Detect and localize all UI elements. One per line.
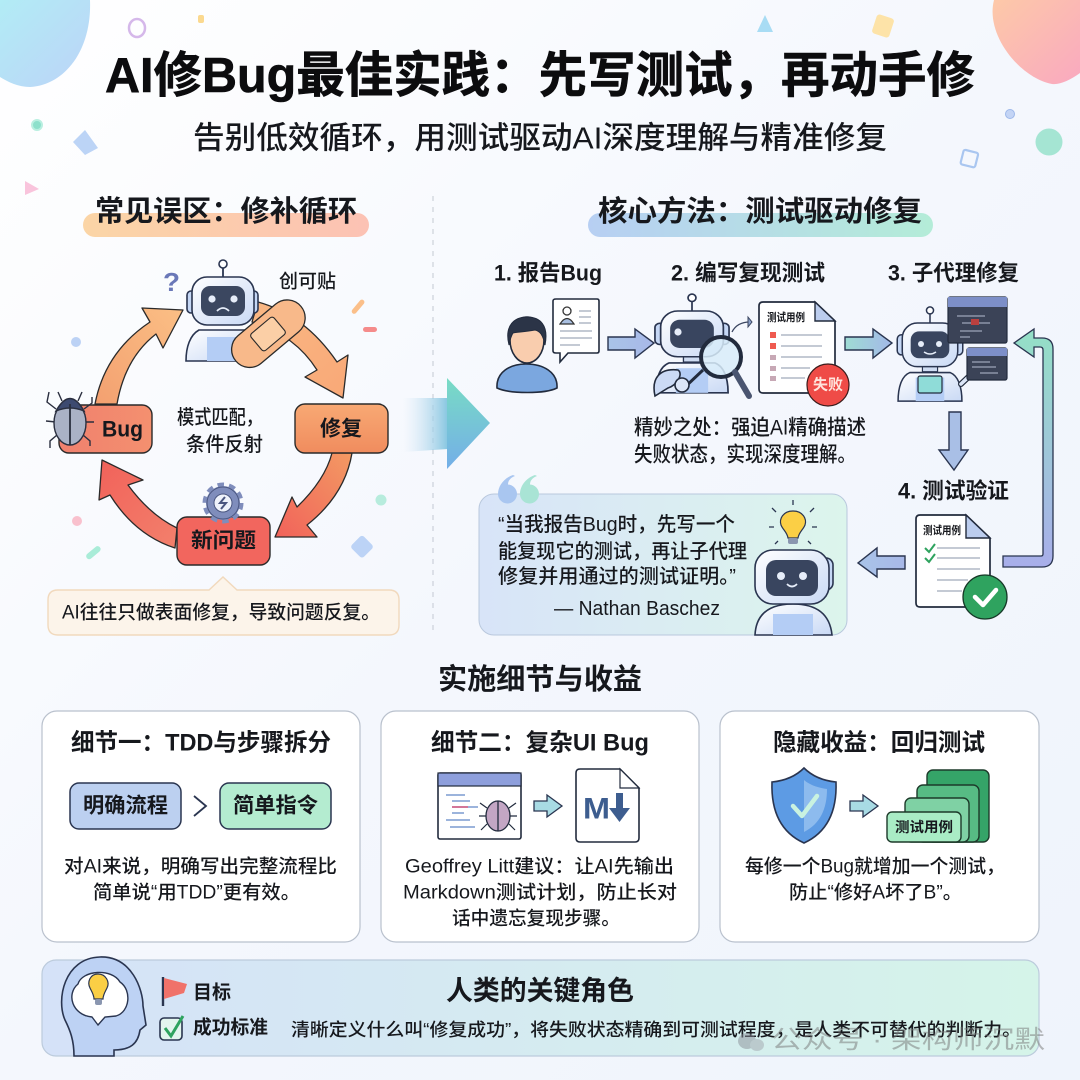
panel: key human role xyxy=(42,957,1039,1056)
section heading: details and benefits: 实施细节与收益 xyxy=(438,663,642,696)
decorative corner blobs xyxy=(0,0,1080,560)
heading: pitfall: 常见误区：修补循环 xyxy=(95,195,357,228)
card body xyxy=(64,856,337,904)
button: explicit flow xyxy=(70,783,181,829)
quote text: 能复现它的测试，再让子代理 xyxy=(498,540,747,563)
arrow: step 3 to 4 xyxy=(939,412,968,470)
panel: quote xyxy=(479,475,847,635)
icon: light bulb xyxy=(769,500,817,544)
button: simple command xyxy=(220,783,331,829)
quote text xyxy=(498,513,747,620)
step 1 label: 1. 报告Bug xyxy=(494,260,602,286)
divider xyxy=(432,196,434,630)
banner body: 清晰定义什么叫“修复成功”，将失败状态精确到可测试程度，是人类不可替代的判断力。 xyxy=(291,1020,1021,1040)
text: subtle point: 精妙之处：强迫AI精确描述 xyxy=(634,416,866,440)
quote text: — Nathan Baschez xyxy=(554,598,720,620)
icon: passing test document: 测试用例 xyxy=(923,523,961,537)
card body: 防止“修好A坏了B”。 xyxy=(789,882,962,904)
icon: stacked test cases xyxy=(887,770,989,842)
card body: Geoffrey Litt建议：让AI先输出 xyxy=(405,856,674,878)
icon: sad robot xyxy=(163,260,258,361)
icon: greater than xyxy=(194,796,206,816)
arrow: step 4 to quote xyxy=(858,548,905,577)
banner title: 人类的关键角色 xyxy=(446,976,634,1006)
icon: robot with magnifier xyxy=(654,294,752,396)
icon: test case document, failed: 失败 xyxy=(813,376,843,394)
icon: test case document, failed xyxy=(759,302,849,406)
center text: 模式匹配， xyxy=(177,406,263,429)
arrow: shield to tests xyxy=(850,795,878,817)
icon: bug xyxy=(46,392,94,448)
arrow: loop back from test to sub-agent xyxy=(1003,329,1053,567)
icon: checkbox xyxy=(160,1016,183,1040)
heading: pitfall xyxy=(83,195,369,237)
icon: sub-agent robot with screens xyxy=(897,297,1007,401)
arrow: step 2 to 3 xyxy=(845,329,892,358)
card body: 对AI来说，明确写出完整流程比 xyxy=(64,856,337,878)
card title: 细节二：复杂UI Bug xyxy=(431,730,649,756)
callout: surface fixes xyxy=(48,577,399,635)
icon: markdown file xyxy=(576,769,639,842)
icon: shield xyxy=(772,768,836,843)
arrow: new problem to bug xyxy=(99,460,177,548)
box: fix: 修复 xyxy=(320,418,362,440)
box: bug: Bug xyxy=(102,416,143,442)
text: subtle point: 失败状态，实现深度理解。 xyxy=(634,444,856,466)
card body: 简单说“用TDD”更有效。 xyxy=(93,882,300,904)
quote text: 修复并用通过的测试证明。” xyxy=(498,565,736,588)
arrow: fix to new problem xyxy=(275,453,352,537)
label: bandage: 创可贴 xyxy=(279,270,336,292)
icon: test case document, failed: 测试用例 xyxy=(767,310,805,324)
center text: 条件反射 xyxy=(186,433,263,456)
title: AI修Bug最佳实践：先写测试，再动手修 xyxy=(105,49,975,103)
panel: detail two xyxy=(381,711,699,942)
panel: detail one xyxy=(42,711,360,942)
heading: core method: 核心方法：测试驱动修复 xyxy=(598,195,922,228)
button: explicit flow: 明确流程 xyxy=(83,794,168,818)
label: success criteria: 成功标准 xyxy=(193,1016,268,1038)
panel: hidden benefit xyxy=(720,711,1039,942)
arrow: bug to robot xyxy=(95,308,183,404)
icon: markdown file: M xyxy=(583,792,610,826)
text: subtle point xyxy=(634,416,866,466)
card title: 隐藏收益：回归测试 xyxy=(773,730,985,756)
icon: UI window with bug xyxy=(438,773,521,839)
arrow: robot to fix xyxy=(252,302,348,398)
arrow: window to markdown xyxy=(534,795,562,817)
icon: person with report xyxy=(497,299,599,392)
icon: gear xyxy=(206,486,240,520)
callout: surface fixes: AI往往只做表面修复，导致问题反复。 xyxy=(62,602,380,624)
card body: Markdown测试计划，防止长对 xyxy=(403,882,677,904)
step 4 label: 4. 测试验证 xyxy=(898,478,1009,504)
arrow: big transition arrow xyxy=(403,378,490,469)
center text xyxy=(177,406,263,456)
icon: bandage xyxy=(224,293,313,375)
box: bug xyxy=(59,405,152,453)
icon: flag xyxy=(163,977,187,1006)
arrow: step 1 to 2 xyxy=(608,329,654,358)
icon: friendly robot xyxy=(755,550,833,635)
label: goal: 目标 xyxy=(193,982,231,1004)
box: new problem: 新问题 xyxy=(191,528,256,552)
icon: stacked test cases: 测试用例 xyxy=(895,819,953,835)
box: new problem xyxy=(177,517,270,565)
card body xyxy=(745,856,1005,904)
card body: 每修一个Bug就增加一个测试， xyxy=(745,856,1005,878)
card title: 细节一：TDD与步骤拆分 xyxy=(71,730,331,756)
icon: sad robot: ? xyxy=(163,267,180,297)
icon: passing test document xyxy=(916,515,1007,619)
box: fix xyxy=(295,404,388,453)
card body: 话中遗忘复现步骤。 xyxy=(452,908,620,930)
button: simple command: 简单指令 xyxy=(233,794,318,818)
step 3 label: 3. 子代理修复 xyxy=(888,260,1019,286)
watermark: 公众号 · 架构师沉默 xyxy=(771,1026,1045,1054)
icon: head with brain and bulb xyxy=(62,957,146,1056)
subtitle: 告别低效循环，用测试驱动AI深度理解与精准修复 xyxy=(193,120,887,156)
panel: core method xyxy=(479,195,1053,635)
quote text: “当我报告Bug时，先写一个 xyxy=(498,513,735,536)
panel: common pitfall, patch loop xyxy=(46,195,399,635)
step 2 label: 2. 编写复现测试 xyxy=(671,260,825,286)
card body xyxy=(403,856,677,930)
icon: quote marks xyxy=(498,475,539,503)
